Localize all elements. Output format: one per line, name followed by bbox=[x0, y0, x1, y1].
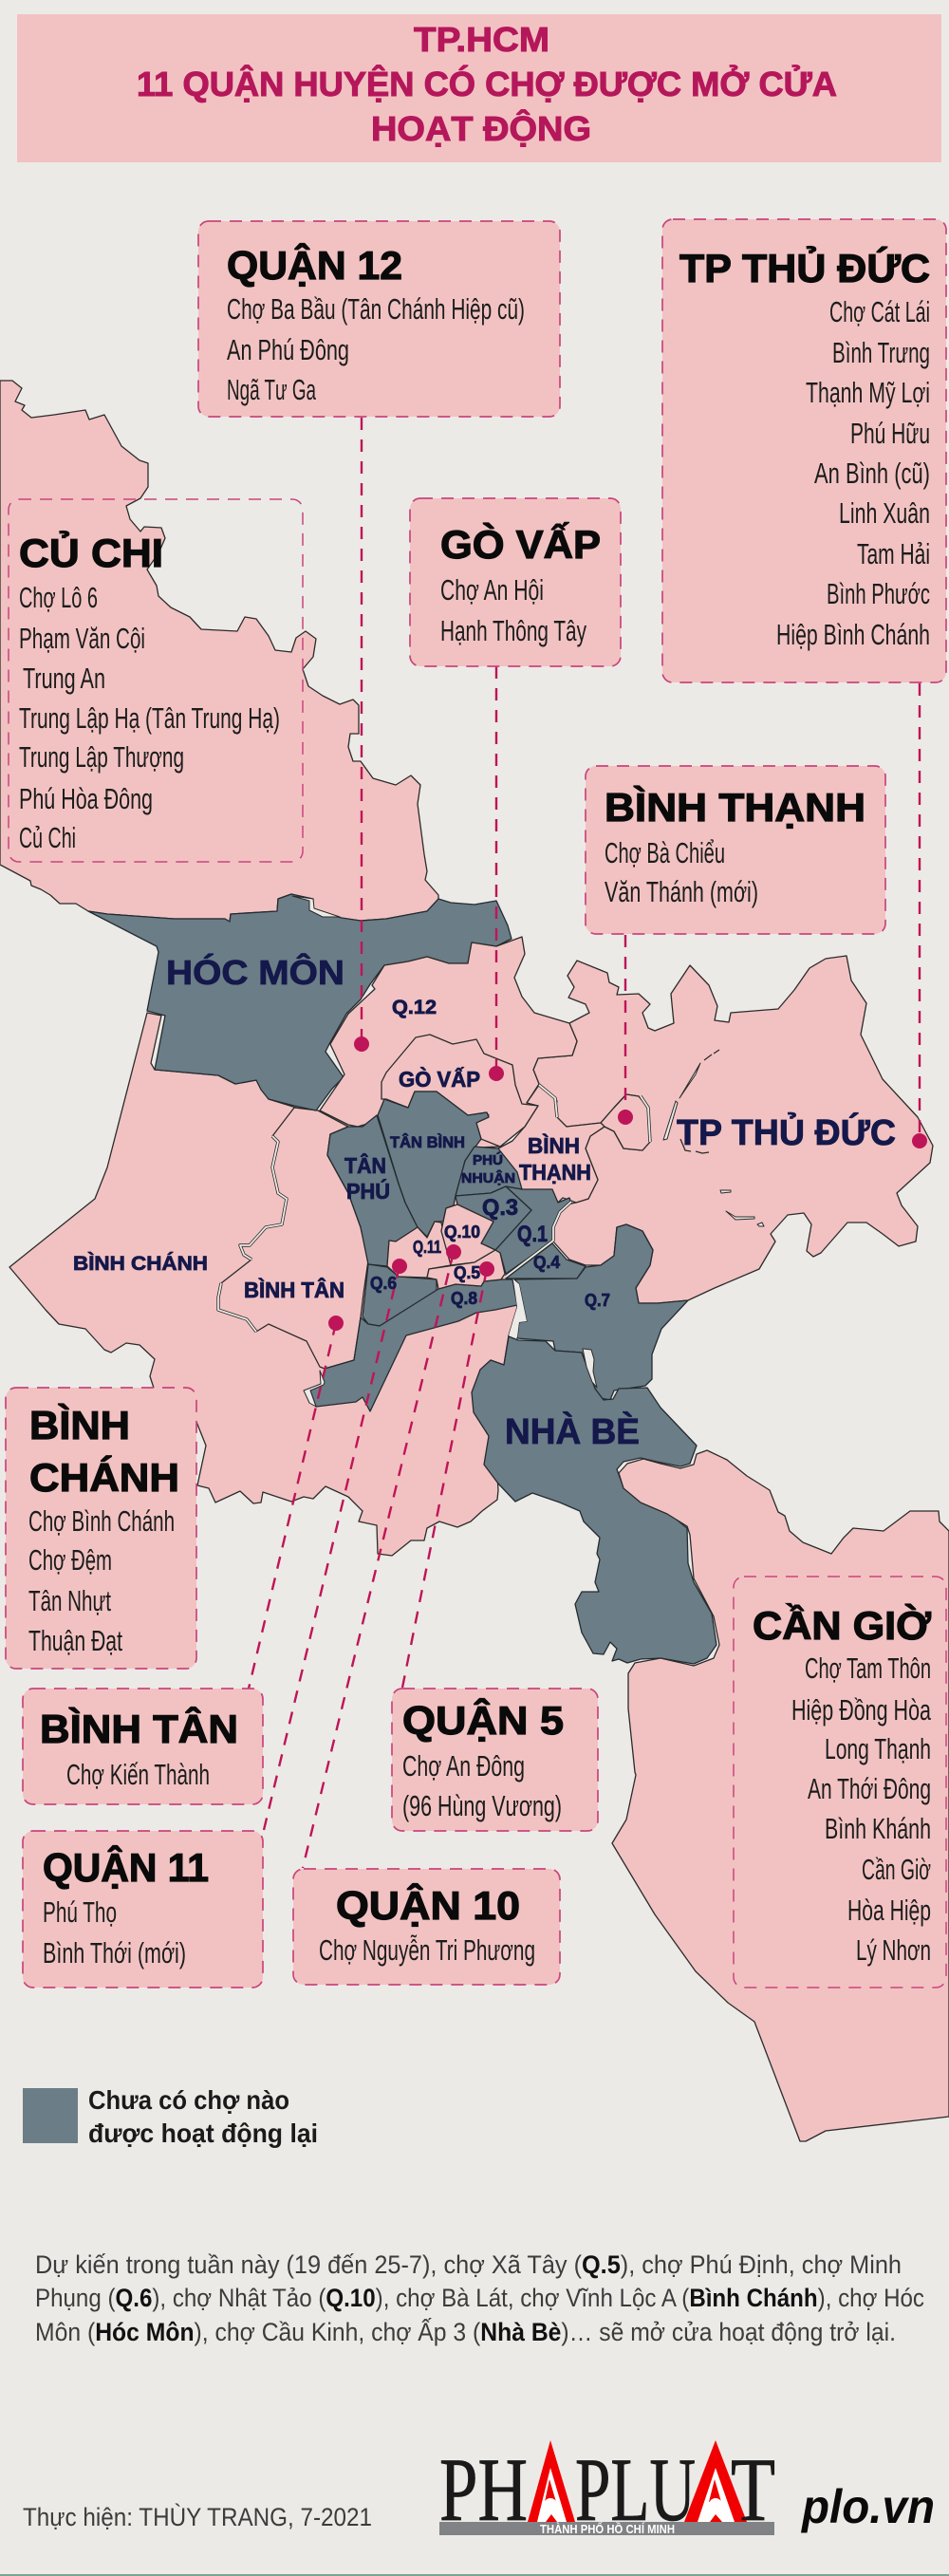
panel: Bình Chánh: Tân Nhựt bbox=[28, 1584, 111, 1617]
panel: Bình Thạnh: Văn Thánh (mới) bbox=[605, 875, 758, 908]
panel: Bình Chánh: Thuận Đạt bbox=[28, 1624, 122, 1657]
legend bbox=[23, 2085, 318, 2148]
map labels: TÂN BÌNH bbox=[390, 1133, 465, 1151]
legend: được hoạt động lại bbox=[88, 2119, 318, 2148]
panel: Bình Chánh: Chợ Bình Chánh bbox=[28, 1504, 175, 1538]
map labels: Q.1 bbox=[517, 1222, 548, 1247]
map labels: Q.3 bbox=[482, 1195, 518, 1221]
panel: Quận 10: QUẬN 10 bbox=[336, 1882, 520, 1928]
title text: TP.HCM bbox=[414, 20, 549, 59]
map labels: THẠNH bbox=[519, 1160, 591, 1185]
district: Nhà Bè bbox=[472, 1336, 716, 1664]
panel: Củ Chi bbox=[9, 499, 303, 862]
district: Quận 11 bbox=[387, 1222, 451, 1278]
panel: Bình Thạnh: Chợ Bà Chiểu bbox=[605, 836, 725, 869]
map labels: HÓC MÔN bbox=[166, 952, 344, 992]
panel: Quận 12 bbox=[198, 221, 560, 417]
district: Bình Tân bbox=[218, 1108, 368, 1369]
panel: Củ Chi: CỦ CHI bbox=[19, 530, 163, 575]
panel: Quận 11 bbox=[23, 1831, 263, 1988]
logo: Pháp Luật: THÀNH PHỐ HỒ CHÍ MINH bbox=[540, 2522, 675, 2536]
map labels: Q.8 bbox=[451, 1289, 477, 1308]
panel: Bình Tân bbox=[23, 1689, 263, 1804]
title banner bbox=[17, 14, 941, 162]
leader lines bbox=[249, 418, 920, 1868]
note paragraph: Dự kiến trong tuần này (19 đến 25-7), chợ Xã Tây (Q.5), chợ Phú Định, chợ Minh bbox=[35, 2250, 902, 2279]
district: Quận 12 bbox=[320, 937, 577, 1148]
panel: Quận 12: QUẬN 12 bbox=[227, 242, 402, 288]
panel: Quận 5: Chợ An Đông bbox=[402, 1749, 525, 1783]
map labels: BÌNH CHÁNH bbox=[73, 1253, 208, 1275]
district: Quận 4 bbox=[506, 1243, 586, 1279]
panel: Bình Chánh: Chợ Đệm bbox=[28, 1543, 112, 1577]
map labels: PHÚ bbox=[473, 1151, 503, 1168]
note paragraph: Phụng (Q.6), chợ Nhật Tảo (Q.10), chợ Bà Lát, chợ Vĩnh Lộc A (Bình Chánh), chợ Hóc bbox=[35, 2284, 924, 2312]
district: Quận 6 bbox=[363, 1264, 437, 1326]
map labels: PHÚ bbox=[346, 1178, 390, 1204]
map labels: NHÀ BÈ bbox=[505, 1410, 640, 1452]
panel: Quận 10: Chợ Nguyễn Tri Phương bbox=[319, 1933, 535, 1967]
district: Quận 3 bbox=[456, 1186, 531, 1250]
district: Cần Giờ bbox=[612, 1450, 949, 2141]
panel: TP Thủ Đức: TP THỦ ĐỨC bbox=[679, 245, 930, 290]
panel: Bình Chánh: BÌNH bbox=[29, 1403, 130, 1447]
legend: Chưa có chợ nào bbox=[88, 2085, 289, 2115]
panel: Củ Chi: Củ Chi bbox=[19, 821, 76, 854]
district: Quận 7 bbox=[514, 1224, 688, 1400]
icon: red letter A bbox=[528, 2440, 575, 2522]
note paragraph: Môn (Hóc Môn), chợ Cầu Kinh, chợ Ấp 3 (Nhà Bè)… sẽ mở cửa hoạt động trở lại. bbox=[35, 2317, 896, 2346]
panel: Củ Chi: Phạm Văn Cội bbox=[19, 622, 145, 655]
panel: Bình Tân: Chợ Kiến Thành bbox=[66, 1758, 210, 1791]
district: Quận 5 bbox=[427, 1250, 505, 1289]
district: Thủ Đức bbox=[533, 956, 933, 1303]
panel: Gò Vấp: GÒ VẤP bbox=[440, 521, 601, 567]
district: Bình Chánh and southern area bbox=[9, 1013, 517, 1556]
panel: Củ Chi: Trung Lập Hạ (Tân Trung Hạ) bbox=[19, 701, 280, 735]
panel: Gò Vấp bbox=[410, 498, 621, 666]
panel: Quận 10 bbox=[293, 1869, 560, 1985]
panel: Cần Giờ: CẦN GIỜ bbox=[753, 1602, 931, 1648]
market location dots bbox=[328, 1036, 927, 1331]
website: plo.vn: plo.vn bbox=[800, 2480, 935, 2533]
panel: Bình Thạnh: BÌNH THẠNH bbox=[605, 785, 865, 830]
panel: Củ Chi: Phú Hòa Đông bbox=[19, 782, 153, 815]
district: Quận 1 bbox=[495, 1186, 571, 1274]
panel: Quận 11: Phú Thọ bbox=[43, 1895, 117, 1929]
panel: Bình Thạnh bbox=[586, 766, 885, 934]
panel: Quận 5: (96 Hùng Vương) bbox=[402, 1789, 562, 1822]
title text: HOẠT ĐỘNG bbox=[371, 108, 591, 148]
panel: Quận 12: Chợ Ba Bầu (Tân Chánh Hiệp cũ) bbox=[227, 292, 525, 326]
panel: Quận 5 bbox=[392, 1689, 598, 1831]
map of Ho Chi Minh City districts bbox=[0, 381, 949, 2141]
map labels: Q.10 bbox=[444, 1223, 480, 1241]
panel: Quận 5: QUẬN 5 bbox=[402, 1697, 564, 1743]
map labels: Q.11 bbox=[413, 1238, 441, 1257]
district: Quận 8 bbox=[310, 1279, 517, 1411]
panel: Gò Vấp: Hạnh Thông Tây bbox=[440, 614, 586, 647]
panel: Quận 12: Ngã Tư Ga bbox=[227, 373, 316, 406]
panel: Bình Tân: BÌNH TÂN bbox=[40, 1706, 238, 1751]
panel: Quận 11: QUẬN 11 bbox=[43, 1844, 209, 1890]
panel: Củ Chi: Chợ Lô 6 bbox=[19, 581, 98, 614]
panel: Bình Chánh bbox=[6, 1388, 196, 1669]
panel: Quận 11: Bình Thới (mới) bbox=[43, 1936, 186, 1969]
map labels bbox=[73, 952, 896, 1452]
title text: 11 QUẬN HUYỆN CÓ CHỢ ĐƯỢC MỞ CỬA bbox=[137, 64, 837, 103]
district: Quận 10 bbox=[441, 1204, 495, 1265]
map labels: GÒ VẤP bbox=[399, 1066, 480, 1092]
map labels: BÌNH bbox=[528, 1132, 580, 1158]
map labels: Q.6 bbox=[370, 1274, 397, 1293]
district: Tân Phú bbox=[327, 1115, 418, 1266]
map labels: Q.5 bbox=[454, 1263, 480, 1282]
map labels: TÂN bbox=[344, 1152, 386, 1178]
icon: red letter A with circumflex bbox=[684, 2440, 747, 2522]
panel: Củ Chi: Trung An bbox=[23, 662, 105, 695]
district: Hóc Môn bbox=[88, 894, 512, 1111]
map labels: Q.7 bbox=[585, 1291, 610, 1310]
logo: Pháp Luật: PH bbox=[439, 2439, 528, 2540]
logo: Pháp Luật: T bbox=[731, 2439, 775, 2540]
panel: Củ Chi: Trung Lập Thượng bbox=[19, 740, 184, 774]
river strips bbox=[218, 896, 764, 1407]
credit line: Thực hiện: THÙY TRANG, 7-2021 bbox=[23, 2502, 372, 2531]
panel: TP Thủ Đức bbox=[662, 219, 946, 682]
title text bbox=[137, 20, 837, 148]
panel: Gò Vấp: Chợ An Hội bbox=[440, 573, 544, 607]
map labels: NHUẬN bbox=[461, 1169, 515, 1186]
panel: Bình Chánh: CHÁNH bbox=[29, 1455, 179, 1500]
district: Củ Chi bbox=[0, 381, 438, 922]
panel: Cần Giờ bbox=[734, 1577, 946, 1988]
district: Tân Bình bbox=[378, 1092, 489, 1237]
logo: Pháp Luật bbox=[439, 2439, 775, 2540]
district: Phú Nhuận bbox=[456, 1147, 522, 1196]
bottom rule bbox=[0, 2574, 949, 2576]
note paragraph bbox=[35, 2250, 924, 2346]
district: Bình Thạnh peninsula bbox=[601, 1094, 650, 1150]
panel: Quận 12: An Phú Đông bbox=[227, 333, 349, 366]
logo: Pháp Luật: PLU bbox=[575, 2439, 696, 2540]
district: Gò Vấp bbox=[381, 1035, 538, 1147]
map labels: BÌNH TÂN bbox=[244, 1277, 344, 1302]
district: Bình Thạnh bbox=[498, 1085, 605, 1203]
map labels: Q.4 bbox=[533, 1253, 560, 1272]
map labels: Q.12 bbox=[392, 997, 437, 1018]
map labels: TP THỦ ĐỨC bbox=[677, 1111, 896, 1153]
